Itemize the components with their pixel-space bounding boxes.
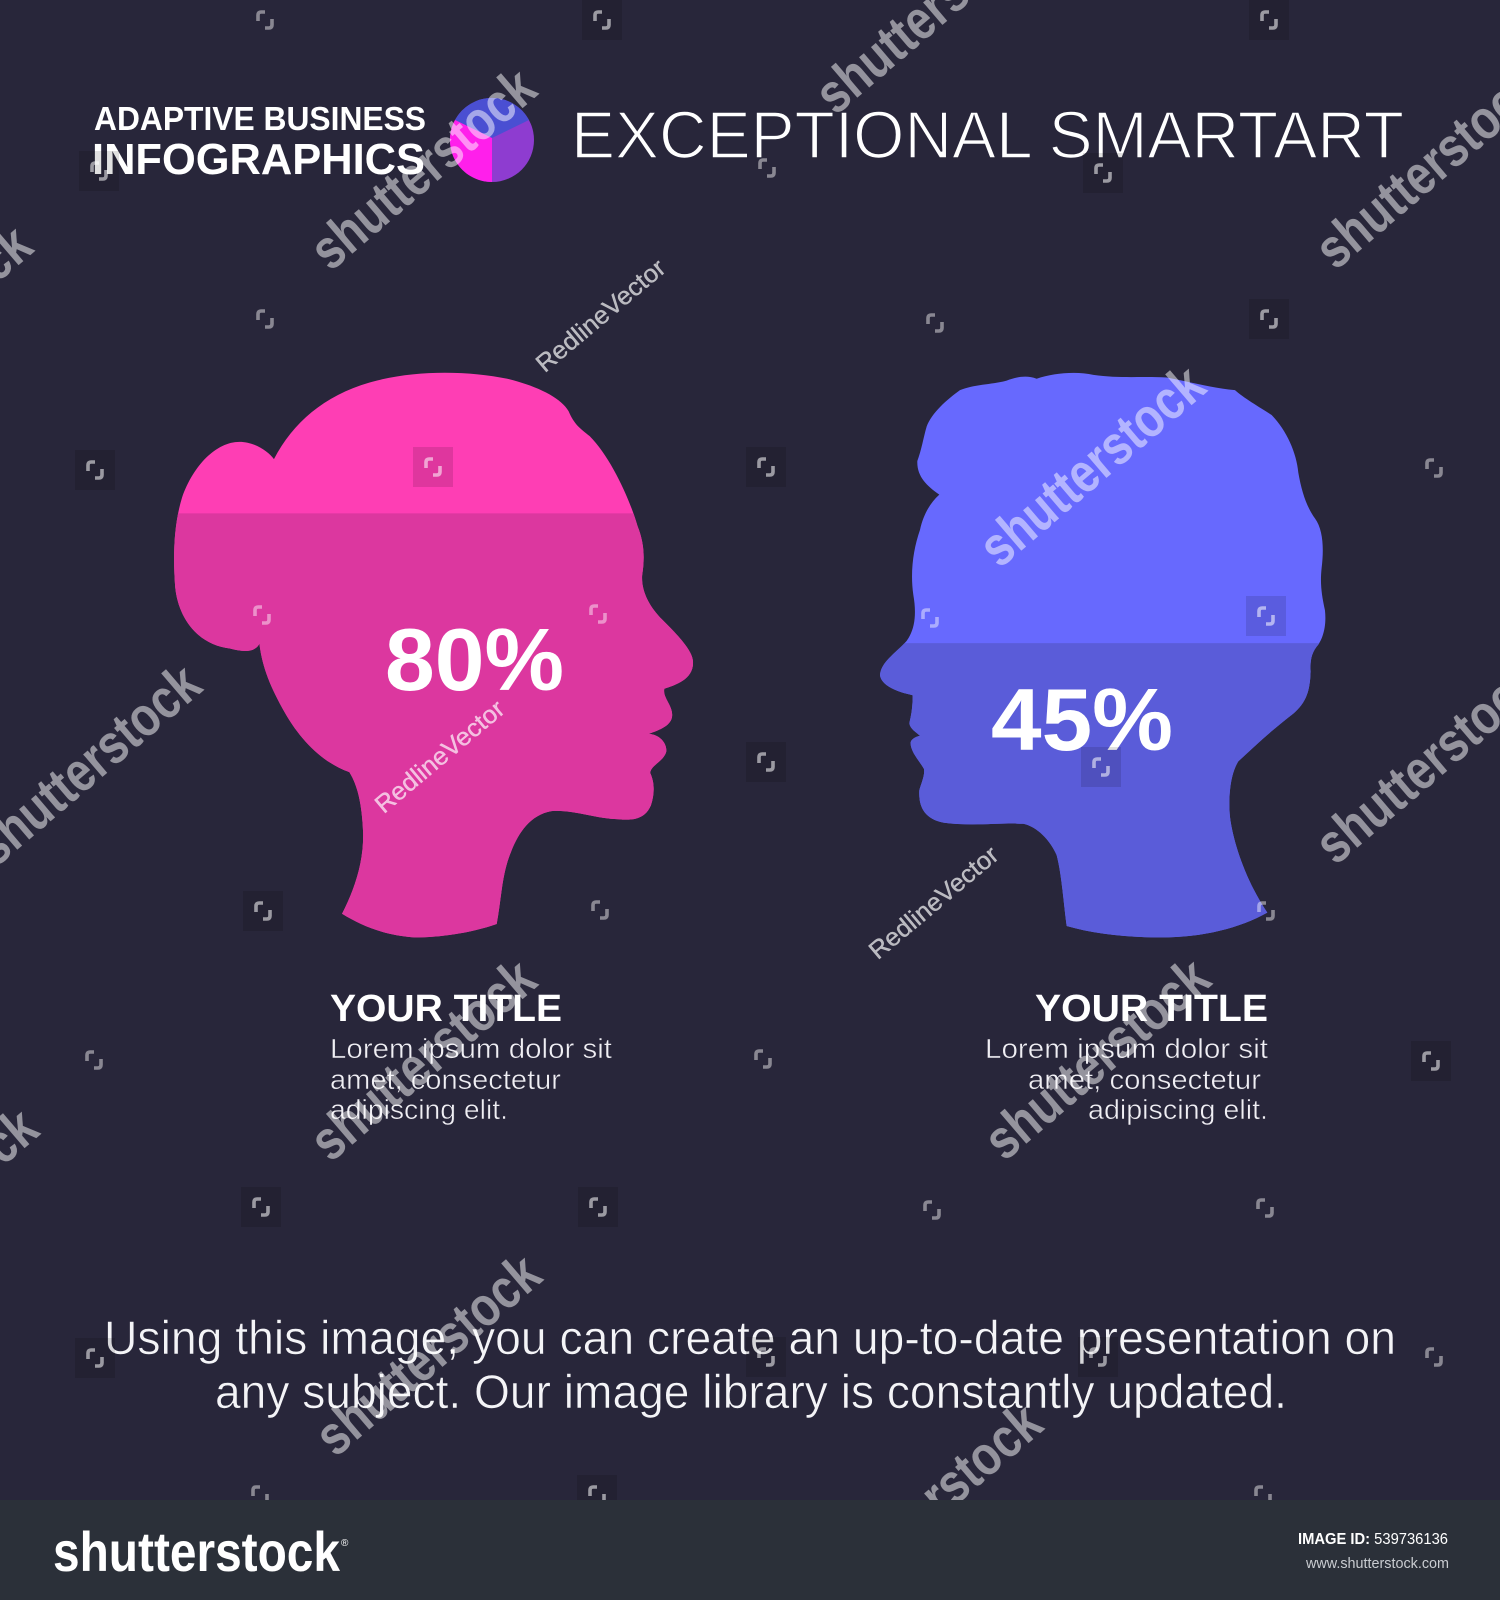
watermark: shutterstock: shutterstock [297, 54, 548, 281]
text block: left caption [330, 988, 612, 1125]
footer bar [0, 1500, 1500, 1600]
text block: left caption: amet, consectetur [330, 1064, 561, 1095]
text block: left caption: adipiscing elit. [330, 1094, 508, 1125]
watermark: RedlineVector: RedlineVector [531, 254, 671, 378]
text block: bottom statement: any subject. Our image library is constantly updated. [215, 1365, 1287, 1418]
watermark: RedlineVector: RedlineVector [864, 841, 1004, 965]
woman silhouette [174, 373, 693, 937]
footer logo: shutterstock [53, 1520, 341, 1583]
watermark: shutterstock: shutterstock [302, 1240, 553, 1467]
text block: left caption: Lorem ipsum dolor sit [330, 1033, 612, 1064]
watermark: shutterstock: shutterstock [971, 944, 1222, 1171]
watermark: RedlineVector: RedlineVector [370, 695, 510, 819]
text block: right caption [985, 988, 1268, 1125]
panel: woman head 80% [174, 373, 693, 937]
text block: right caption: adipiscing elit. [1088, 1094, 1268, 1125]
text block: bottom statement [104, 1311, 1396, 1418]
value 45%: 45% [991, 670, 1173, 769]
watermark: RedlineVector [370, 254, 1004, 965]
watermark: shutterstock: shutterstock [966, 351, 1217, 578]
footer url: www.shutterstock.com [1305, 1555, 1449, 1572]
man silhouette [880, 373, 1325, 937]
icon: logo pie [450, 98, 534, 182]
panel: man head 45% [880, 373, 1325, 937]
header logo text: ADAPTIVE BUSINESS [94, 100, 426, 137]
footer registered mark: ® [341, 1538, 349, 1549]
text block: right caption: YOUR TITLE [1035, 988, 1268, 1030]
header logo text: INFOGRAPHICS [92, 135, 425, 184]
header logo text [92, 100, 426, 184]
text block: right caption: amet, consectetur [1028, 1064, 1261, 1095]
text block: right caption: Lorem ipsum dolor sit [985, 1033, 1268, 1064]
watermark: shutterstock: shutterstock [297, 945, 548, 1172]
value 80%: 80% [385, 610, 564, 709]
footer image id: IMAGE ID: 539736136 [1298, 1531, 1448, 1548]
text block: left caption: YOUR TITLE [330, 988, 562, 1030]
title: EXCEPTIONAL SMARTART [571, 98, 1404, 173]
text block: bottom statement: Using this image, you can create an up-to-date presentation on [104, 1311, 1396, 1364]
